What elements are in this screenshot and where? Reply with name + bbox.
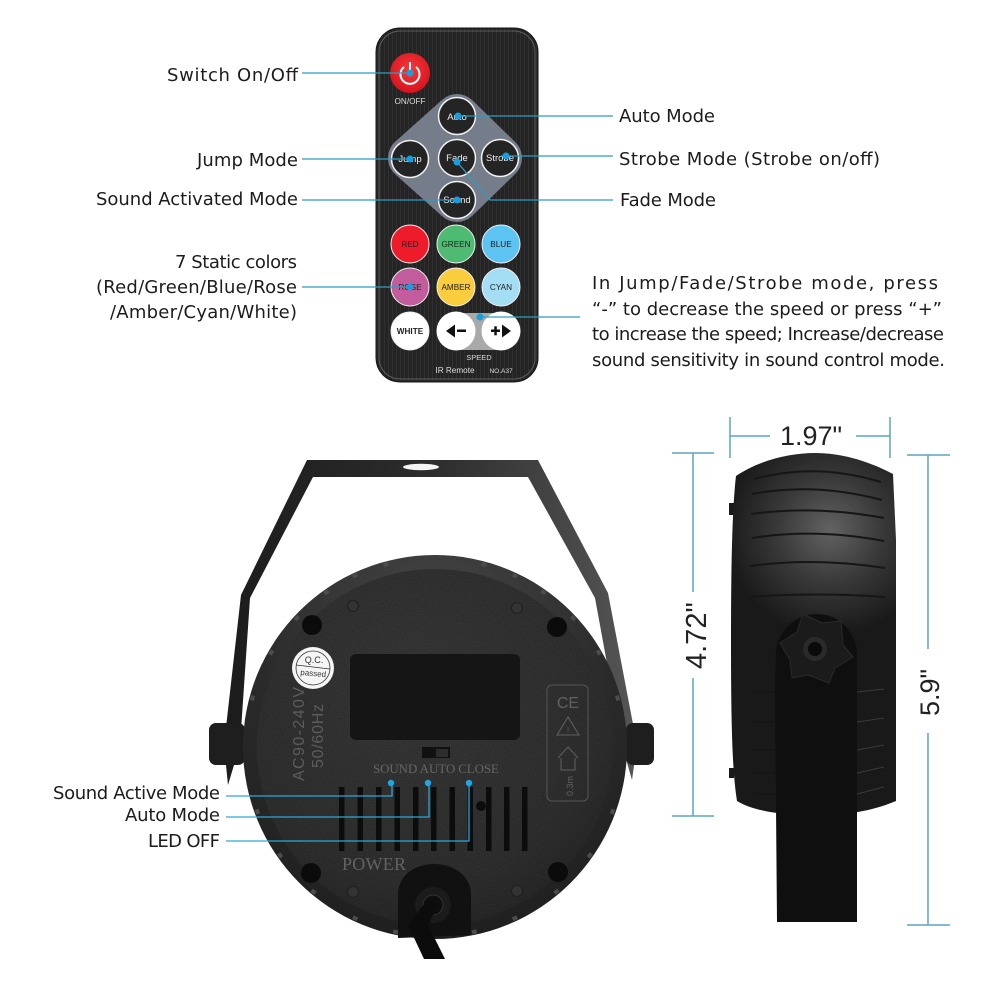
small rivets <box>348 600 522 898</box>
left remote labels: 7 Static colors <box>175 252 297 273</box>
left remote labels: /Amber/Cyan/White) <box>110 302 297 323</box>
mode button labels: Auto <box>447 112 467 123</box>
mounting arm <box>775 614 857 922</box>
mode button diamond <box>410 116 500 200</box>
dimension: diameter 4.72 inches: 4.72" <box>681 602 713 669</box>
remote footer text <box>435 353 513 375</box>
star knob <box>780 614 853 683</box>
certification box: 0.3m <box>565 776 575 796</box>
rear switch labels: LED OFF <box>148 831 220 852</box>
speed buttons <box>436 312 520 350</box>
colour button labels: WHITE <box>397 327 424 336</box>
colour button labels: GREEN <box>441 240 471 249</box>
mode button labels: Jump <box>398 154 422 165</box>
right remote labels: Auto Mode <box>619 106 715 127</box>
right remote labels: Fade Mode <box>620 190 716 211</box>
callout lines: remote <box>302 70 613 320</box>
left remote labels <box>96 65 299 323</box>
mode button labels: Strobe <box>486 153 514 164</box>
slide switch <box>422 747 450 758</box>
certification box <box>547 685 588 801</box>
rear plate <box>257 569 613 925</box>
housing ribs <box>750 471 885 794</box>
speed explanation text <box>592 273 945 371</box>
right remote labels: Strobe Mode (Strobe on/off) <box>619 149 880 170</box>
power button <box>390 53 430 93</box>
QC passed sticker: passed <box>300 668 326 679</box>
remote body <box>376 28 538 382</box>
speed explanation text: sound sensitivity in sound control mode. <box>592 350 945 371</box>
on/off label: ON/OFF <box>395 97 425 106</box>
panel: lamp rear view <box>209 460 654 959</box>
lamp housing <box>243 555 627 939</box>
dimension: width 1.97 inches: 1.97" <box>780 421 842 451</box>
rear switch labels: Sound Active Mode <box>53 783 220 804</box>
left remote labels: Jump Mode <box>196 150 298 171</box>
voltage markings <box>291 687 327 781</box>
certification box: ! <box>567 726 569 735</box>
dimension: width 1.97 inches <box>730 417 890 458</box>
colour button labels: AMBER <box>441 283 471 292</box>
colour button labels: RED <box>401 240 419 249</box>
voltage markings: 50/60Hz <box>310 704 327 768</box>
voltage markings: AC90-240V <box>291 687 308 781</box>
mode button labels: Fade <box>446 153 468 164</box>
right remote labels <box>619 106 880 211</box>
dimension: height 5.9 inches <box>907 455 950 925</box>
speed explanation text: In Jump/Fade/Strobe mode, press <box>592 273 938 294</box>
colour button labels: BLUE <box>490 240 512 249</box>
mounting bracket <box>224 460 637 785</box>
panel: lamp side view <box>729 453 896 922</box>
rear switch labels <box>53 783 220 852</box>
dimension: height 5.9 inches: 5.9" <box>915 669 945 716</box>
side tabs <box>729 503 734 778</box>
dimension: diameter 4.72 inches <box>672 453 714 816</box>
colour buttons <box>391 225 520 350</box>
colour button labels: ROSE <box>398 283 422 292</box>
mode buttons <box>392 98 518 218</box>
left remote labels: Sound Activated Mode <box>96 189 298 210</box>
housing rim bumps <box>250 562 620 934</box>
screw holes <box>301 615 568 883</box>
rear switch labels: Auto Mode <box>125 805 220 826</box>
remote footer text: SPEED <box>466 353 492 362</box>
bracket knobs <box>209 723 654 765</box>
speed explanation text: “-” to decrease the speed or press “+” <box>592 299 942 320</box>
colour button labels: CYAN <box>490 283 512 292</box>
mode button labels: Sound <box>443 195 471 206</box>
speaker slots <box>339 787 528 851</box>
QC passed sticker: Q.C. <box>305 655 323 665</box>
power cable gland <box>398 864 471 959</box>
panel: remote control <box>376 28 538 382</box>
switch position labels: SOUND AUTO CLOSE <box>373 761 499 776</box>
mode button labels <box>398 112 514 206</box>
remote footer text: NO.A37 <box>489 368 513 375</box>
power label: POWER <box>342 854 406 874</box>
display panel <box>350 654 520 740</box>
certification box: CE <box>557 695 579 712</box>
left remote labels: (Red/Green/Blue/Rose <box>96 277 297 298</box>
left remote labels: Switch On/Off <box>167 65 299 86</box>
remote footer text: IR Remote <box>435 366 475 375</box>
side housing <box>731 453 896 815</box>
QC passed sticker <box>292 647 334 689</box>
callouts: rear switch positions <box>226 780 472 841</box>
speed explanation text: to increase the speed; Increase/decrease <box>592 324 944 345</box>
colour button labels <box>397 240 512 336</box>
